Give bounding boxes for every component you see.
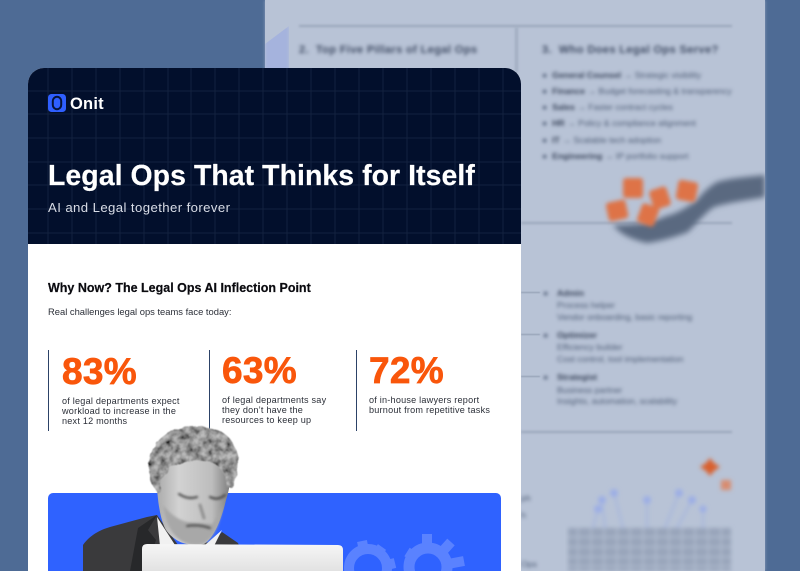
- stat description: next 12 months: [62, 416, 127, 426]
- header banner: [28, 68, 521, 244]
- logo wordmark: Onit: [70, 95, 104, 113]
- lower divider: [521, 431, 732, 433]
- main card: [28, 68, 521, 571]
- list: who legal ops serves: ● Sales → Faster contract cycles: [542, 102, 673, 112]
- stat: 72%: [356, 350, 490, 431]
- stat description: of legal departments expect: [62, 396, 180, 406]
- list: who legal ops serves: ● HR → Policy & compliance alignment: [542, 118, 696, 128]
- list: maturity stages: [521, 288, 694, 407]
- list: maturity stages: ●: [543, 372, 548, 382]
- section intro: Real challenges legal ops teams face today:: [48, 306, 231, 317]
- hand: [613, 175, 765, 243]
- clipped text fragments behind card: h: [521, 510, 526, 520]
- stat: 63%: [209, 350, 326, 430]
- stat description: workload to increase in the: [62, 406, 176, 416]
- header grid pattern: [28, 68, 521, 244]
- background document panel: Insights, automation, scalability: [557, 396, 677, 406]
- icon: gears: [344, 534, 465, 571]
- orange blocks: [605, 178, 699, 227]
- stat description: resources to keep up: [222, 415, 311, 425]
- stat number: 63%: [222, 350, 297, 391]
- jacket: [83, 515, 250, 571]
- facial features: [179, 494, 225, 528]
- logo: [48, 94, 104, 113]
- list: maturity stages: ●: [543, 330, 548, 340]
- list: maturity stages: Cost control, tool implementation: [557, 354, 684, 364]
- stat description: they don’t have the: [222, 405, 303, 415]
- list: who legal ops serves: ● Finance → Budget forecasting & transparency: [542, 86, 732, 96]
- heading: who serves: 3. Who Does Legal Ops Serve?: [542, 44, 719, 56]
- list: maturity stages: ●: [543, 288, 548, 298]
- list: maturity stages: Business partner: [557, 385, 622, 395]
- shirt collar: [157, 517, 222, 546]
- stat description: of in-house lawyers report: [369, 395, 479, 405]
- stat description: of legal departments say: [222, 395, 326, 405]
- stat description: [222, 395, 326, 425]
- stat description: [62, 396, 180, 426]
- clipped text fragments behind card: ph: [521, 493, 531, 503]
- middle divider: [521, 222, 732, 224]
- clipped text fragments behind card: Ops: [521, 559, 537, 569]
- heading: pillars: 2. Top Five Pillars of Legal Ops: [299, 44, 477, 56]
- list: maturity stages: Process helper: [557, 300, 615, 310]
- hair: [149, 426, 238, 494]
- list: maturity stages: Optimizer: [557, 330, 597, 340]
- stat number: 72%: [369, 350, 444, 391]
- blue hero panel: [48, 493, 501, 571]
- beard: [163, 504, 223, 545]
- list: who legal ops serves: ● General Counsel → Strategic visibility: [542, 70, 701, 80]
- list: who legal ops serves: [541, 70, 732, 162]
- clipped text fragments behind card: [521, 493, 538, 570]
- icon: Onit logo mark: [48, 94, 66, 112]
- stat description: burnout from repetitive tasks: [369, 405, 490, 415]
- icon: hand holding orange blocks: [603, 172, 765, 246]
- section heading: Why Now? The Legal Ops AI Inflection Point: [48, 281, 311, 295]
- list: maturity stages: Admin: [557, 288, 584, 298]
- list: maturity stages: Vendor onboarding, basic reporting: [557, 312, 692, 322]
- list: who legal ops serves: ● Engineering → IP portfolio support: [542, 151, 689, 161]
- list: who legal ops serves: ● IT → Scalable tech adoption: [542, 135, 661, 145]
- face: [157, 448, 230, 545]
- background document panel: [265, 0, 765, 571]
- laptop: [142, 544, 343, 571]
- top divider: [299, 25, 732, 27]
- stat number: 83%: [62, 351, 137, 392]
- stat: 83%: [48, 350, 180, 431]
- title: Legal Ops That Thinks for Itself: [48, 160, 475, 192]
- stat description: [369, 395, 490, 415]
- column divider: [515, 27, 518, 72]
- photo: man at laptop: [83, 425, 343, 571]
- blue accent corner: [265, 26, 289, 71]
- list: maturity stages: Efficiency builder: [557, 342, 623, 352]
- list: maturity stages: Strategist: [557, 372, 597, 382]
- subtitle: AI and Legal together forever: [48, 200, 230, 215]
- illustration: keyboard with circuit lines: [566, 456, 734, 571]
